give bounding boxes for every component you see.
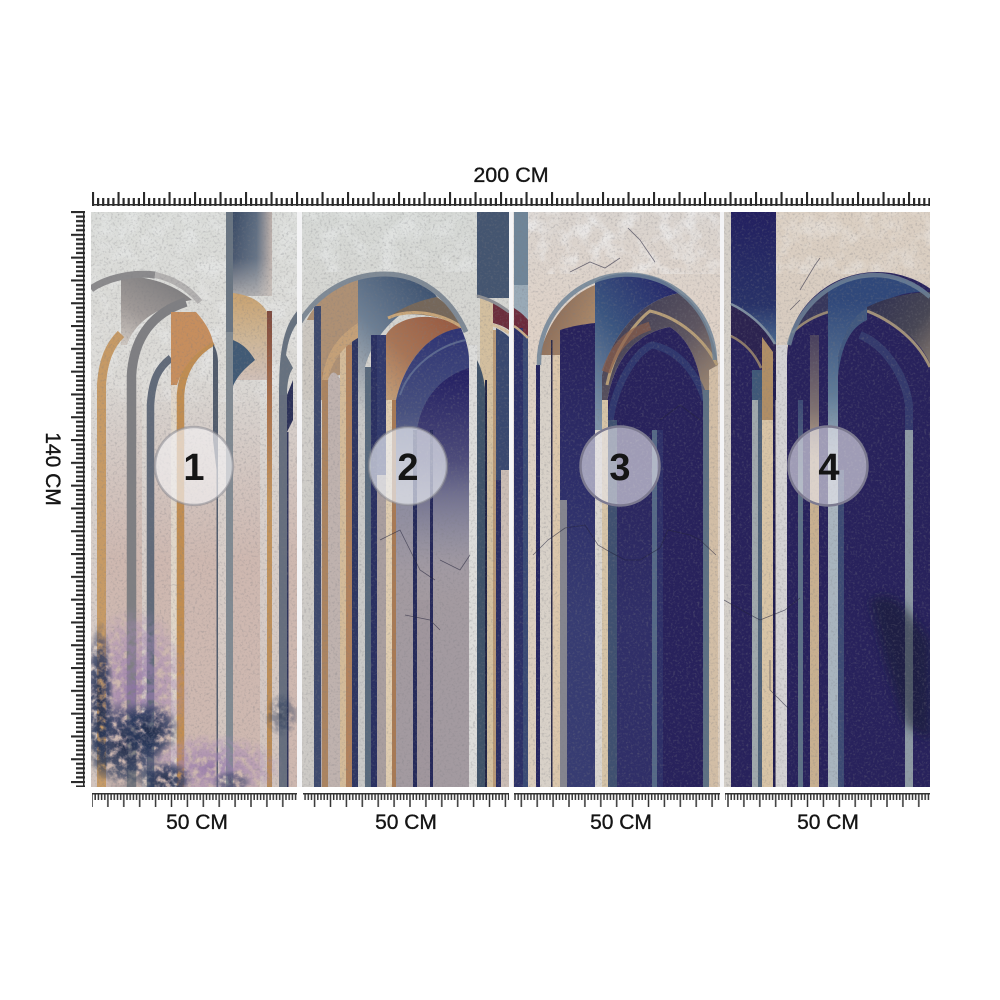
panel gaps <box>297 212 724 787</box>
badge: panel 1: 1 <box>183 447 205 489</box>
left column <box>724 212 787 787</box>
panel 2: pale to blue arches <box>297 212 511 787</box>
inner blue arch <box>396 328 469 787</box>
label: panel 1 width: 50 CM <box>166 811 228 834</box>
brown inner vault <box>386 317 462 400</box>
ruler: left scale <box>71 211 85 787</box>
panel 4: dark navy arches <box>724 212 932 792</box>
arch interior <box>303 273 463 420</box>
purple and dark stains <box>91 614 297 787</box>
badge: panel 1 <box>155 427 233 505</box>
arch interior <box>787 272 932 792</box>
badge: panel 4 <box>788 426 868 506</box>
wall cracks <box>380 228 820 710</box>
texture: speckled grain <box>91 212 930 787</box>
dark thin pier <box>213 344 218 787</box>
panel 3: navy arches <box>511 212 724 787</box>
badge: panel 3 <box>580 426 660 506</box>
panel 1: pale arches <box>80 212 300 803</box>
badge: panel 3: 3 <box>609 447 631 489</box>
badge: panel 2: 2 <box>397 447 419 489</box>
right column and crimson vault <box>469 212 509 787</box>
badge: panel 4: 4 <box>818 447 840 489</box>
mural: four panel wallpaper with arches <box>80 212 932 803</box>
badge: panel 2 <box>369 427 447 505</box>
ruler: top scale <box>92 192 930 206</box>
label: panel 2 width: 50 CM <box>375 811 437 834</box>
right slate arch <box>279 310 298 787</box>
label: overall height: 140 CM <box>41 432 64 506</box>
dark stain <box>870 596 930 740</box>
arch interior <box>540 274 718 787</box>
tall pillar and column head <box>226 212 272 787</box>
label: panel 4 width: 50 CM <box>797 811 859 834</box>
outer arch band <box>300 274 466 332</box>
label: panel 3 width: 50 CM <box>590 811 652 834</box>
left column <box>514 212 540 787</box>
ruler: bottom scales <box>92 793 930 807</box>
orange vault block <box>171 312 213 385</box>
arch band and grey vault <box>91 274 200 345</box>
arch stripes <box>102 302 213 787</box>
title: overall width: 200 CM <box>473 163 549 187</box>
